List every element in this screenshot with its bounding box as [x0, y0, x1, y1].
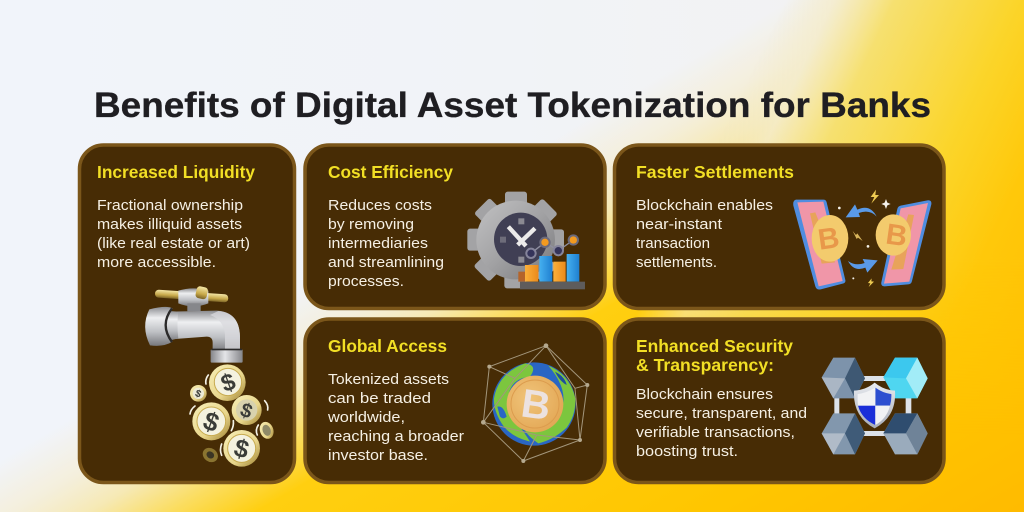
- cube top right: [883, 358, 928, 398]
- text block: global access: investor base.: [328, 447, 428, 464]
- text block: cost efficiency: and streamlining: [328, 254, 444, 271]
- heading: faster settlements: Faster Settlements: [636, 162, 794, 182]
- text block: increased liquidity: makes illiquid assets: [97, 216, 242, 233]
- shield: [854, 383, 895, 428]
- cube bottom left: [822, 413, 865, 454]
- gear: [467, 192, 564, 288]
- text block: enhanced security: secure, transparent, and: [636, 405, 807, 422]
- text block: increased liquidity: (like real estate or art): [97, 235, 250, 252]
- faucet: [145, 286, 243, 363]
- text block: enhanced security: Blockchain ensures: [636, 386, 773, 403]
- text block: global access: worldwide,: [327, 409, 405, 426]
- heading: cost efficiency: Cost Efficiency: [328, 162, 453, 182]
- coins: $: [199, 405, 224, 438]
- globe: [492, 362, 576, 446]
- text block: cost efficiency: intermediaries: [328, 235, 428, 252]
- bar chart: [518, 234, 585, 289]
- text block: global access: can be traded: [328, 390, 431, 407]
- text block: increased liquidity: [97, 197, 250, 271]
- heading: global access: Global Access: [328, 336, 447, 356]
- text block: faster settlements: transaction: [636, 235, 710, 252]
- icon: phones exchanging bitcoin: [793, 190, 931, 290]
- text block: faster settlements: Blockchain enables: [636, 197, 773, 214]
- text block: increased liquidity: Fractional ownership: [97, 197, 243, 214]
- icon: globe with bitcoin: [481, 343, 589, 463]
- heading: enhanced security and transparency: [636, 336, 793, 375]
- text block: cost efficiency: processes.: [328, 273, 404, 290]
- text block: faster settlements: settlements.: [636, 254, 717, 271]
- coins: $: [237, 399, 255, 423]
- heading: enhanced security and transparency: & Transparency:: [636, 355, 774, 375]
- heading: increased liquidity: Increased Liquidity: [97, 162, 255, 182]
- text block: cost efficiency: by removing: [328, 216, 414, 233]
- panel: cost efficiency: [305, 145, 605, 308]
- heading: enhanced security and transparency: Enhanced Security: [636, 336, 793, 356]
- icon: faucet pouring coins: [145, 286, 276, 467]
- text block: cost efficiency: [328, 197, 444, 290]
- coins: $: [231, 434, 252, 465]
- cube bottom right: [883, 413, 928, 454]
- coins: $: [217, 368, 239, 398]
- text block: increased liquidity: more accessible.: [97, 254, 216, 271]
- panel: enhanced security and transparency: [614, 319, 944, 482]
- panel: increased liquidity: [80, 145, 294, 482]
- exchange arrows: [846, 204, 878, 273]
- sparks and lightning: [838, 190, 891, 287]
- icon: gear with clock and bar chart: [467, 192, 585, 289]
- panel: faster settlements: [614, 145, 944, 308]
- coins: $: [193, 388, 203, 401]
- connectors: [834, 376, 911, 436]
- text block: cost efficiency: Reduces costs: [328, 197, 432, 214]
- text block: enhanced security: boosting trust.: [636, 443, 738, 460]
- text block: global access: reaching a broader: [328, 428, 464, 445]
- panel: global access: [305, 319, 605, 482]
- text block: global access: [327, 371, 464, 464]
- left phone: B: [816, 221, 842, 257]
- bitcoin coin: B: [518, 382, 553, 429]
- cube top left: [822, 358, 865, 398]
- text block: faster settlements: [636, 197, 773, 271]
- text block: faster settlements: near-instant: [636, 216, 723, 233]
- text block: enhanced security: verifiable transactions,: [636, 424, 795, 441]
- coins: [190, 364, 276, 467]
- text block: global access: Tokenized assets: [328, 371, 449, 388]
- right phone: B: [884, 218, 909, 253]
- icon: blockchain cubes with shield: [822, 358, 928, 454]
- title: Benefits of Digital Asset Tokenization for Banks: [94, 86, 931, 125]
- wireframe: [483, 346, 587, 461]
- text block: enhanced security: [636, 386, 807, 460]
